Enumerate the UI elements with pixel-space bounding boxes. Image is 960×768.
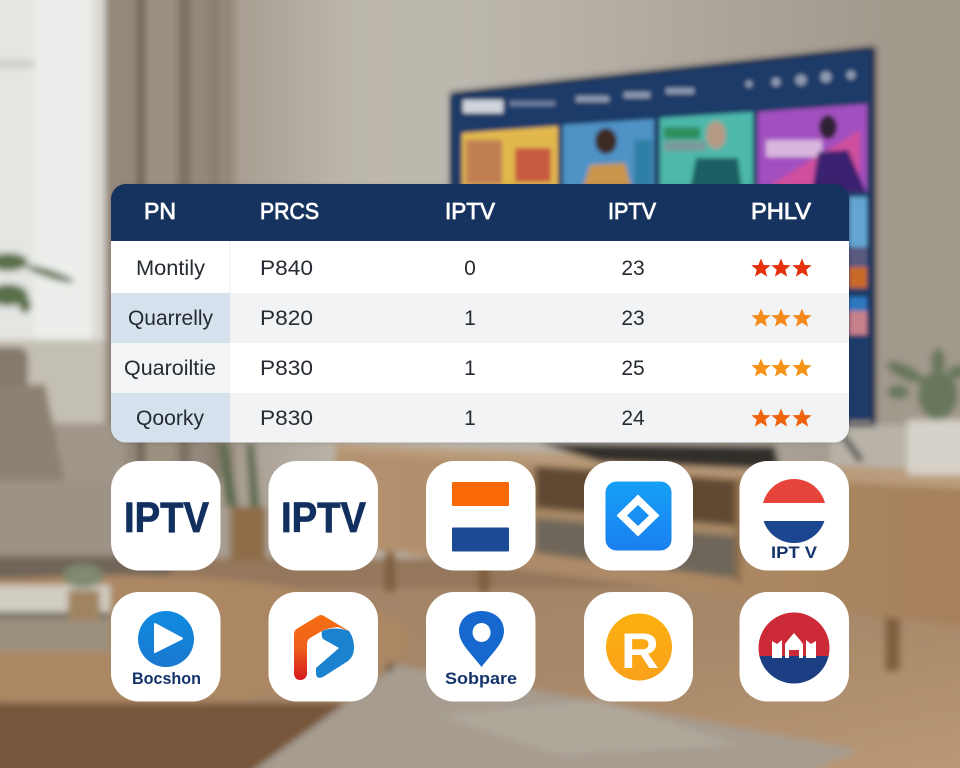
window [0, 0, 111, 430]
table header labels: IPTV [608, 198, 657, 224]
row: Quarterly: 1 [464, 307, 476, 330]
table header labels: PN [144, 198, 176, 224]
table header bar [111, 184, 849, 241]
row: Quarterly [128, 307, 645, 330]
tv screen [452, 50, 871, 422]
floor [0, 578, 960, 768]
comparison table [111, 184, 849, 443]
table row backgrounds [111, 241, 849, 443]
icon: red and blue castle circle [740, 592, 849, 702]
icon: IPTV wordmark 2: IPTV [281, 494, 366, 542]
row: Qoorky: P830 [260, 407, 313, 430]
tv menu [463, 70, 856, 113]
icon: tricolour circle with IPT V [740, 461, 849, 570]
icon: yellow R circle [584, 592, 693, 702]
icon: IPTV wordmark 2 [268, 461, 378, 570]
icon: location pin Sobpare [426, 592, 536, 702]
wall [0, 0, 960, 600]
icon: IPTV wordmark 1: IPTV [124, 494, 209, 542]
tv screen content [452, 50, 871, 425]
tv bottom rim [849, 420, 871, 425]
tv stand base [539, 443, 780, 470]
row: Monthly: 0 [464, 257, 476, 280]
tv right edge thumbnails [849, 197, 867, 335]
row: Quarterly: P820 [260, 307, 313, 330]
lower wall glow [830, 425, 960, 475]
icon: location pin Sobpare: Sobpare [445, 669, 517, 688]
icon: play circle Bocshon: Bocshon [132, 670, 201, 688]
row: Monthly: 23 [621, 257, 645, 280]
stars row 1 [751, 258, 812, 277]
tv card purple [758, 104, 867, 192]
tv card yellow [462, 126, 558, 190]
icon: tricolour circle with IPT V: IPT V [771, 543, 818, 562]
icon: orange and blue P [268, 592, 378, 702]
icon: IPTV wordmark 1 [111, 461, 220, 570]
stars row 4 [751, 408, 812, 427]
books and small plant [0, 564, 110, 652]
stars row 2 [751, 308, 812, 327]
tv card teal [660, 112, 753, 190]
icon: yellow R circle: R [621, 623, 659, 679]
curtain [105, 0, 235, 480]
row: Monthly: P840 [260, 257, 313, 280]
potted floor plant [218, 443, 266, 561]
row: Monthly [136, 257, 645, 280]
tv console [335, 443, 960, 628]
icon: orange and blue bars [426, 461, 536, 570]
table header labels: IPTV [445, 198, 496, 224]
rug [240, 665, 860, 768]
tv stand leg [840, 434, 864, 462]
row: Qoorky: 1 [464, 407, 476, 430]
window plant [0, 253, 75, 313]
row: Quarterly: 23 [621, 307, 645, 330]
table header labels: PHLV [751, 198, 812, 224]
icon: blue diamond tile [584, 461, 693, 570]
row: Quaroiltie [124, 357, 645, 380]
icon: play circle Bocshon [111, 592, 220, 702]
row: Quarterly: Quarrelly [128, 307, 213, 330]
row: Qoorky: Qoorky [136, 407, 205, 430]
right-hand plant and vase [884, 348, 960, 475]
row: Qoorky [136, 407, 645, 430]
stars row 3 [751, 358, 812, 377]
row: Quaroiltie: Quaroiltie [124, 357, 216, 380]
tv card blue [563, 119, 654, 190]
row: Quaroiltie: 1 [464, 357, 476, 380]
sofa [0, 347, 172, 582]
tv frame [450, 46, 876, 426]
row: Quaroiltie: 25 [621, 357, 645, 380]
row: Monthly: Montily [136, 257, 206, 280]
table header labels [144, 198, 812, 224]
coffee table [0, 575, 410, 768]
row: Quaroiltie: P830 [260, 357, 313, 380]
console legs [385, 548, 900, 671]
table header labels: PRCS [260, 198, 319, 224]
row: Qoorky: 24 [621, 407, 645, 430]
